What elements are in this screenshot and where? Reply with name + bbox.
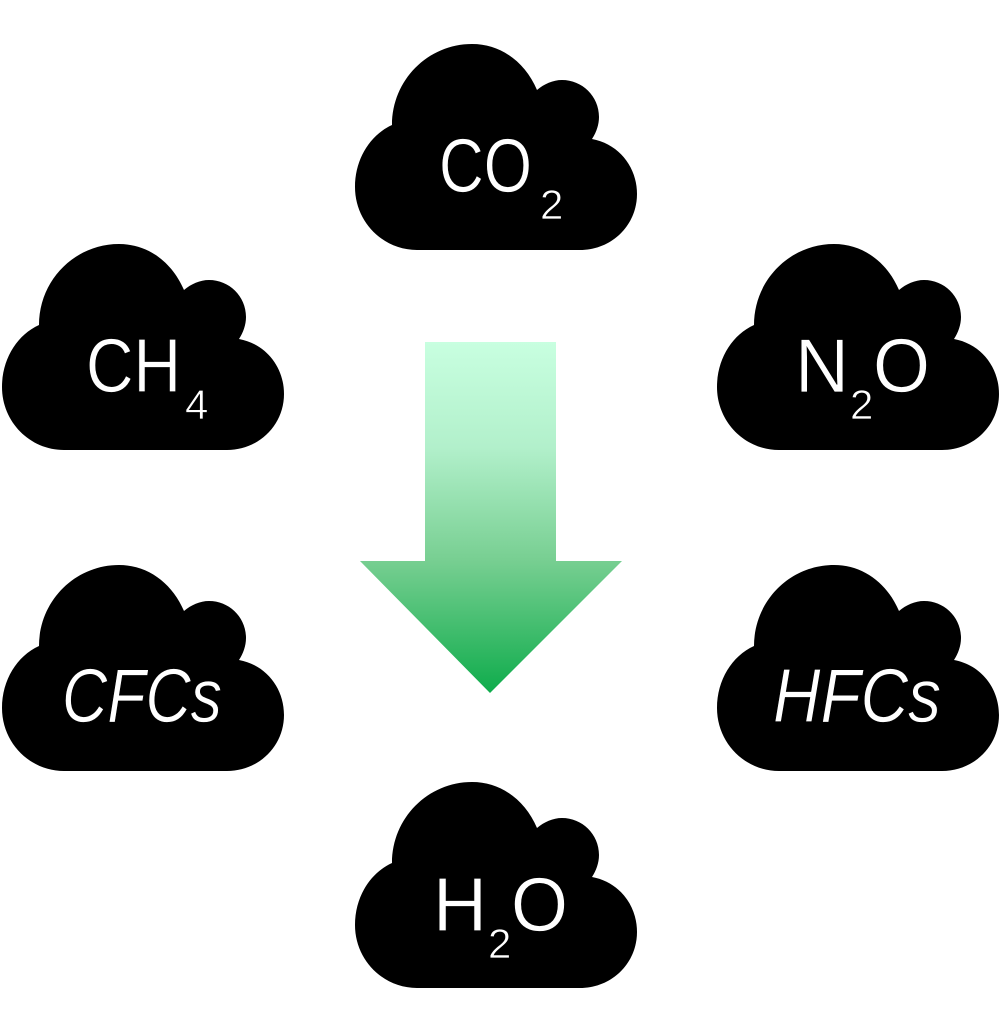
cloud shape: [2, 565, 284, 771]
label: N2O: [795, 324, 930, 428]
cloud shape: [717, 244, 999, 450]
cloud: HFCs: [717, 565, 999, 771]
cloud shape: [355, 782, 637, 988]
cloud shape: [717, 565, 999, 771]
label: H2O: O: [511, 863, 568, 948]
label: CO2: CO: [439, 124, 532, 209]
cloud: CH4: [2, 244, 284, 450]
label: CO2: 2: [540, 181, 563, 228]
label: CFCs: CFCs: [62, 654, 222, 739]
label: H2O: 2: [488, 920, 511, 967]
label: CH4: 4: [185, 381, 208, 428]
label: N2O: 2: [850, 381, 873, 428]
cloud: CFCs: [2, 565, 284, 771]
label: CH4: CH: [86, 324, 181, 409]
label: N2O: N: [795, 324, 849, 409]
label: H2O: H: [433, 863, 487, 948]
label: H2O: [433, 863, 568, 967]
cloud: CO2: [355, 44, 637, 250]
label: N2O: O: [873, 324, 930, 409]
arrow: downward green gradient: [360, 342, 622, 693]
cloud shape: [355, 44, 637, 250]
label: HFCs: HFCs: [773, 654, 941, 739]
cloud shape: [2, 244, 284, 450]
cloud: H2O: [355, 782, 637, 988]
cloud: N2O: [717, 244, 999, 450]
